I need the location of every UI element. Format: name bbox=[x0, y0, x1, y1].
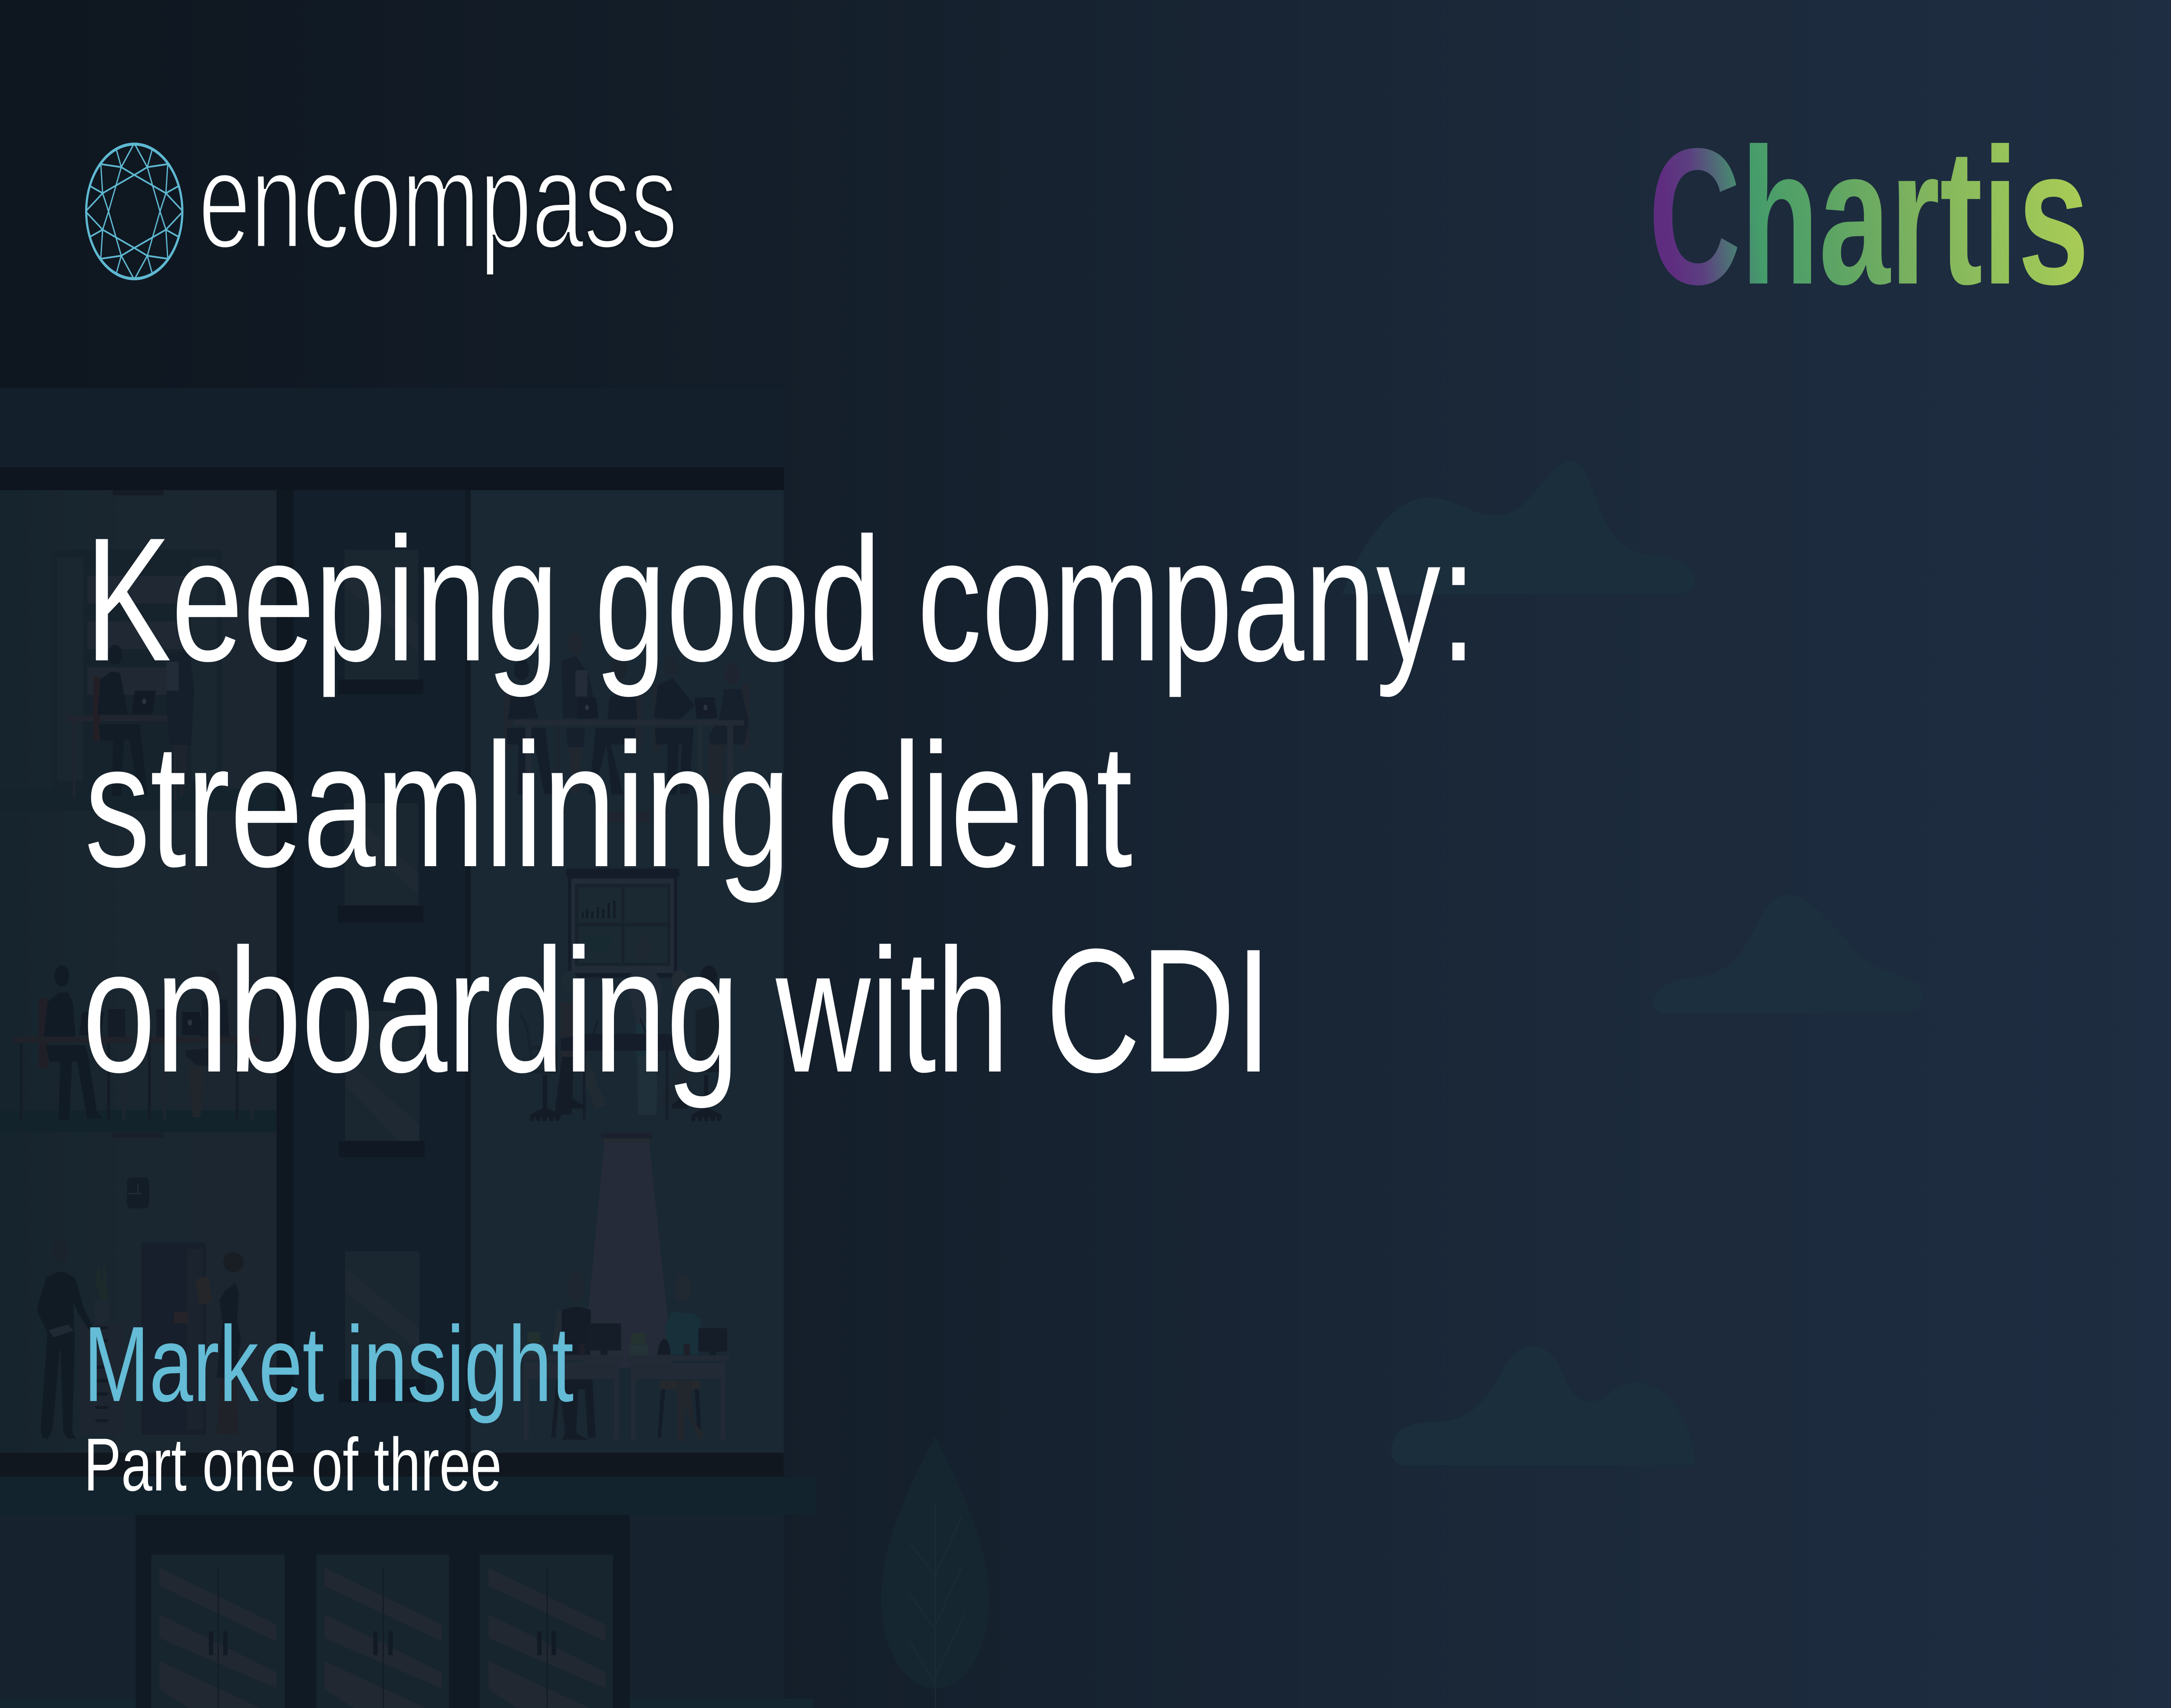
ceiling lamp bbox=[113, 490, 164, 495]
ground floor wall left bbox=[0, 1515, 136, 1708]
floor 1 right: meeting table with four colleagues bbox=[504, 632, 749, 822]
floor 3 lamp fixture bbox=[601, 1133, 652, 1142]
computer monitors bbox=[587, 1323, 727, 1355]
lamp beam over floor 3 bbox=[583, 1142, 673, 1368]
lamp of floor below bbox=[604, 811, 650, 822]
clock hands bbox=[129, 1184, 142, 1194]
books and telephone bbox=[525, 1332, 671, 1355]
mugs bbox=[579, 1344, 690, 1355]
laptop one bbox=[578, 697, 599, 719]
standing man holding folder bbox=[36, 1239, 93, 1439]
tall cabinet bbox=[142, 1243, 206, 1435]
desk bbox=[66, 715, 183, 799]
laptop right bbox=[182, 1012, 204, 1035]
colleague three bbox=[654, 656, 695, 794]
office chair bbox=[39, 998, 49, 1068]
wordmark: encompass bbox=[198, 124, 677, 277]
cloud top bbox=[1342, 461, 1695, 594]
desks bbox=[524, 1355, 729, 1440]
entrance doors bbox=[152, 1555, 613, 1708]
floor 1 left: filing room with man at desk and woman bbox=[53, 490, 222, 799]
seated audience left bbox=[520, 963, 607, 1114]
logo: encompass bbox=[86, 124, 677, 280]
seated woman bbox=[186, 970, 229, 1117]
standing woman with clipboard bbox=[166, 620, 194, 796]
binders bbox=[108, 1009, 167, 1037]
colleague one bbox=[507, 659, 553, 794]
dark ledge above entrance bbox=[0, 1453, 784, 1477]
building roof band bbox=[0, 388, 784, 467]
ground floor wall right bbox=[630, 1515, 784, 1708]
meeting table bbox=[514, 720, 744, 795]
filing cabinet bbox=[53, 550, 222, 789]
floor strip upper left bbox=[0, 789, 277, 811]
right column edge bbox=[465, 490, 471, 1453]
floor strip middle left bbox=[0, 1110, 277, 1132]
seated man at desk bbox=[44, 965, 103, 1120]
ground strip bbox=[0, 1699, 813, 1708]
dark structural column bbox=[277, 490, 294, 1453]
illustration: office building bbox=[0, 388, 817, 1708]
laptop bbox=[132, 691, 155, 714]
logo: Chartis: Chartis bbox=[1649, 108, 2089, 325]
man in vest on phone bbox=[551, 1271, 596, 1440]
leaf bbox=[881, 1437, 989, 1708]
office chair bases bbox=[530, 1075, 722, 1121]
standing colleague with documents bbox=[562, 632, 597, 794]
scenery: clouds and leaf bbox=[881, 461, 1923, 1708]
right rooms wall bbox=[471, 490, 784, 1453]
seated man bbox=[93, 645, 148, 796]
presenter bbox=[627, 937, 662, 1114]
central windows bbox=[338, 550, 425, 1402]
desks bbox=[13, 1037, 259, 1121]
floor 3 right: two desks with people on telephones bbox=[524, 1271, 729, 1441]
plant bbox=[95, 1261, 108, 1300]
floor 2 left: two desks with man and woman bbox=[13, 965, 259, 1208]
woman in teal on phone bbox=[658, 1275, 704, 1441]
seated audience right bbox=[658, 966, 724, 1107]
presentation screen bbox=[566, 869, 680, 978]
laptop left bbox=[79, 1012, 104, 1035]
building parapet bbox=[0, 467, 784, 490]
standing woman with folder bbox=[195, 1252, 244, 1434]
wall clock bbox=[127, 1177, 149, 1208]
cloud bottom bbox=[1391, 1346, 1695, 1465]
entrance frame bbox=[136, 1515, 630, 1708]
colleague two bbox=[589, 658, 637, 794]
chairs bbox=[504, 683, 749, 750]
central stairwell column bbox=[294, 490, 465, 1453]
colleague four bbox=[709, 663, 749, 794]
conference table bbox=[561, 1018, 685, 1119]
chest of drawers bbox=[79, 1300, 125, 1435]
title bbox=[82, 501, 1476, 1110]
ceiling lamp bbox=[112, 1133, 163, 1138]
icon: cut-gem compass bbox=[86, 143, 183, 280]
entrance canopy bbox=[0, 1477, 817, 1515]
subtitle: market insight: Market insight bbox=[84, 1305, 574, 1424]
title: Keeping good company: bbox=[85, 501, 1476, 699]
title: onboarding with CDI bbox=[82, 912, 1272, 1110]
title: streamlining client bbox=[85, 707, 1133, 905]
floor 3 left: reception with man, drawers, cabinet and woman bbox=[36, 1184, 244, 1439]
series label: Part one of three bbox=[84, 1422, 502, 1507]
left rooms wall bbox=[0, 490, 277, 1453]
floor 2 right: presentation screen and conference table bbox=[520, 869, 724, 1121]
cloud middle bbox=[1653, 895, 1923, 1013]
laptop two bbox=[695, 697, 717, 719]
